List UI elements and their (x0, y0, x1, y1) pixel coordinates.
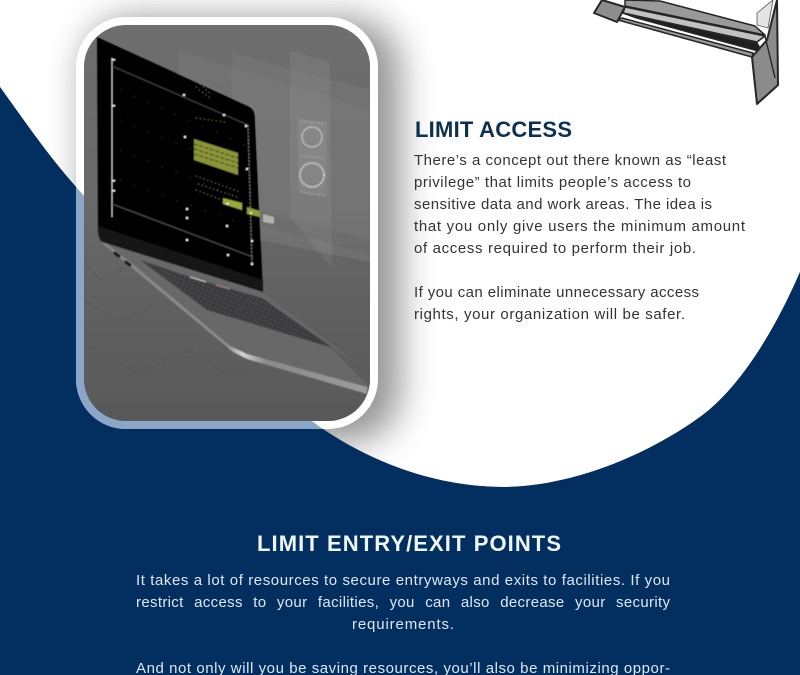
laptop photo (84, 25, 370, 421)
text block: entry and exit points: It takes a lot of resources to secure entryways and exits to facilities. If you (136, 572, 670, 589)
keyboard (140, 260, 333, 348)
text block: least privilege: sensitive data and work areas. The idea is (414, 196, 712, 213)
translucent panels (178, 50, 370, 268)
hologram dials (300, 121, 325, 196)
image shadow (84, 18, 400, 442)
text block: least privilege (414, 152, 746, 323)
text block: entry and exit points: requirements. (352, 616, 454, 633)
navy overlay to keep the field clean (0, 87, 800, 487)
heading: limit access: LIMIT ACCESS (415, 117, 572, 142)
ports (115, 253, 130, 265)
text block: least privilege: If you can eliminate unnecessary access (414, 284, 699, 301)
laptop base (102, 240, 370, 395)
screen chart lines (112, 58, 253, 263)
text block: entry and exit points (136, 572, 670, 675)
text block: least privilege: of access required to perform their job. (414, 240, 696, 257)
frame border (80, 21, 374, 425)
heading: limit entry and exit points: LIMIT ENTRY/EXIT POINTS (257, 531, 561, 556)
screen dots (112, 59, 253, 265)
text block: least privilege: privilege” that limits people’s access to (414, 174, 691, 191)
icon: wall bracket (594, 0, 778, 104)
green data (194, 139, 238, 175)
text block: least privilege: rights, your organization will be safer. (414, 306, 685, 323)
panel: laptop photo frame (80, 21, 374, 425)
text block: least privilege: There’s a concept out there known as “least (414, 152, 727, 169)
frame border over navy (76, 187, 323, 429)
laptop screen (97, 37, 263, 292)
text block: least privilege: that you only give users the minimum amount (414, 218, 746, 235)
floor lines (84, 262, 262, 375)
text block: entry and exit points: restrict access to your facilities, you can also decrease your security (136, 594, 670, 611)
